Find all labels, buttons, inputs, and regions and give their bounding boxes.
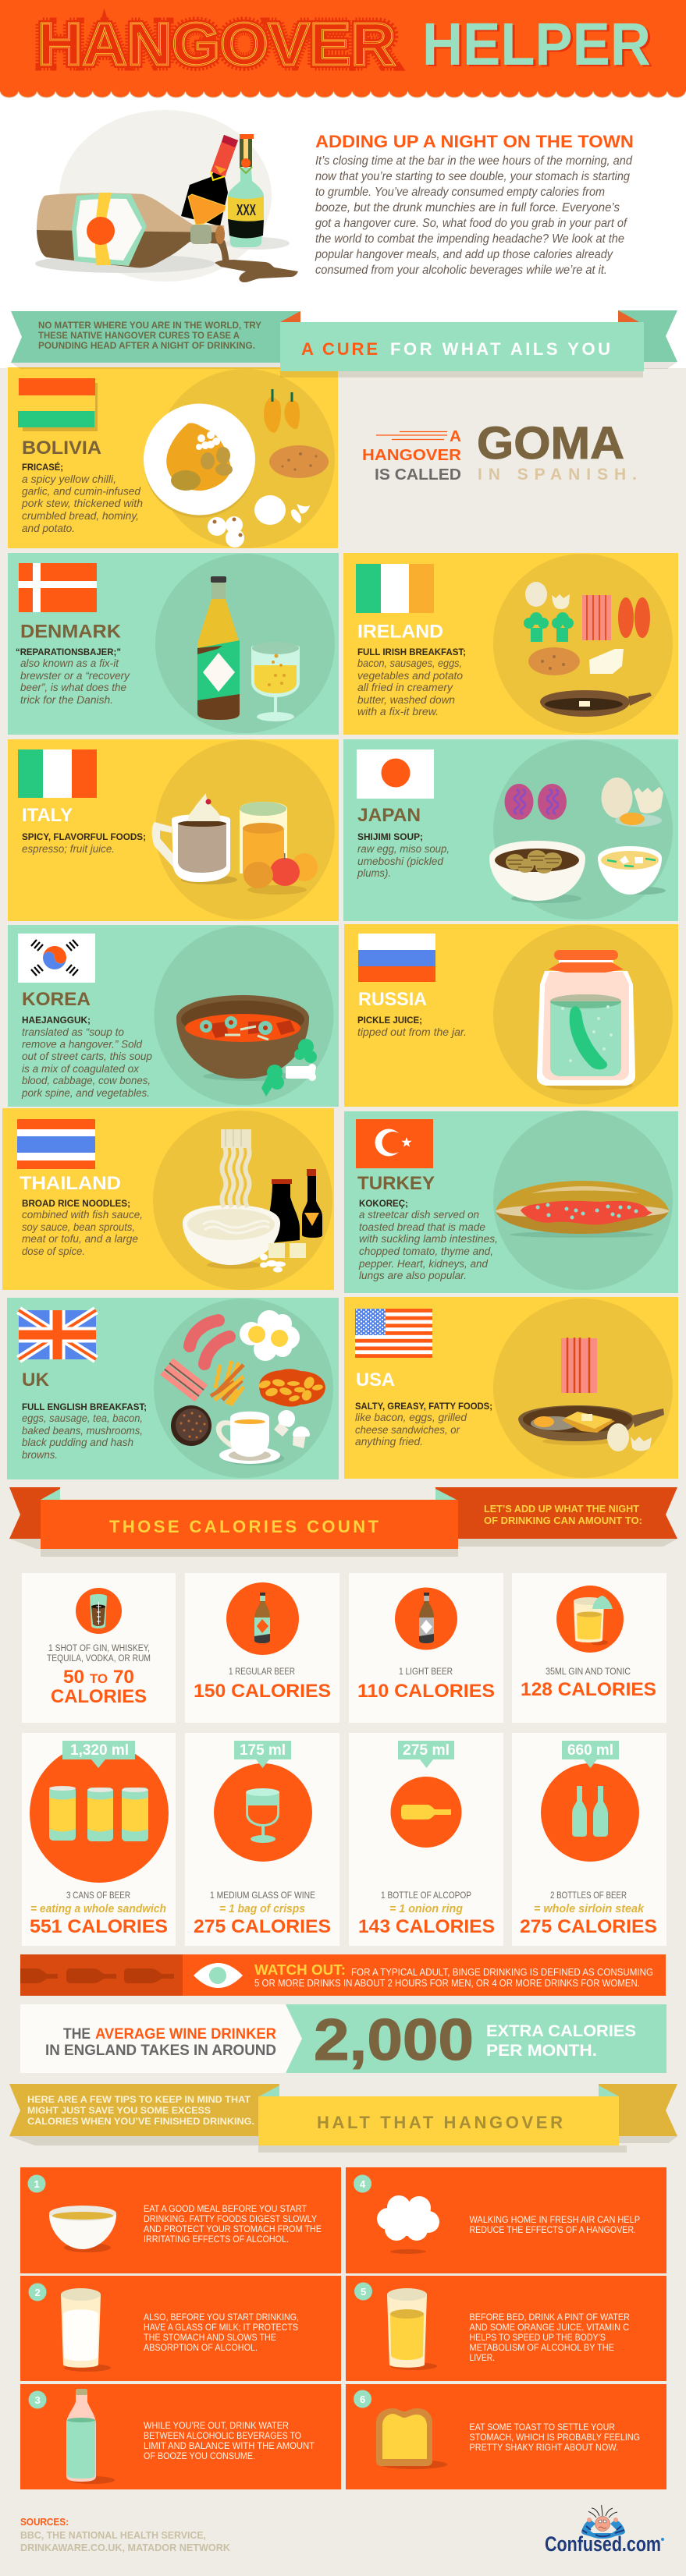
card: gin and tonic bbox=[512, 1573, 666, 1723]
text: Japan: raw egg, miso soup, bbox=[357, 843, 450, 855]
tip 1 bbox=[20, 2167, 341, 2273]
text: Russia bbox=[357, 989, 467, 1038]
tip 2: ABSORPTION OF ALCOHOL. bbox=[144, 2342, 258, 2353]
text: Russia: tipped out from the jar. bbox=[357, 1026, 467, 1038]
icon: water bottle bbox=[66, 2389, 115, 2484]
flag: Thailand bbox=[17, 1119, 95, 1169]
panel: Ireland bbox=[343, 553, 678, 735]
card: glass of wine: 275 CALORIES bbox=[194, 1916, 331, 1937]
text: Turkey: with suckling lamb intestines, bbox=[359, 1233, 498, 1245]
card: gin and tonic: 35ML GIN AND TONIC bbox=[546, 1667, 631, 1677]
text: Japan: JAPAN bbox=[357, 805, 421, 826]
text: Korea: is a mix of coagulated ox bbox=[22, 1063, 140, 1075]
icon: light beer bottle bbox=[419, 1593, 434, 1643]
tip 3: 3 bbox=[34, 2394, 41, 2406]
text: USA: like bacon, eggs, grilled bbox=[355, 1412, 467, 1423]
text: Japan: SHIJIMI SOUP; bbox=[357, 833, 423, 842]
callout: watch out: FOR A TYPICAL ADULT, BINGE DRINKING IS DEFINED AS CONSUMING bbox=[351, 1967, 653, 1978]
text: UK: UK bbox=[22, 1369, 50, 1391]
text: Russia: PICKLE JUICE; bbox=[357, 1016, 422, 1026]
panel: Italy bbox=[8, 739, 339, 921]
tag: 275 ml bbox=[398, 1741, 454, 1768]
icon: eye bbox=[194, 1963, 243, 1988]
illustration: full English breakfast bbox=[160, 1310, 325, 1465]
text: Thailand: dose of spice. bbox=[22, 1245, 85, 1257]
ribbon heading: HALT THAT HANGOVER bbox=[317, 2113, 563, 2132]
ribbon note: CALORIES WHEN YOU’VE FINISHED DRINKING. bbox=[27, 2116, 254, 2127]
icon: toast bbox=[376, 2408, 447, 2469]
flag: Turkey bbox=[356, 1119, 433, 1168]
tip 4 bbox=[346, 2167, 666, 2273]
ribbon heading: FOR WHAT AILS YOU bbox=[390, 339, 610, 359]
text: Korea bbox=[21, 989, 152, 1099]
tip 5 bbox=[346, 2276, 666, 2381]
intro paragraph: got a hangover cure. So, what food do you grab in your part of bbox=[315, 217, 628, 230]
icon: bottles bbox=[20, 1968, 174, 1983]
tip 4: WALKING HOME IN FRESH AIR CAN HELP bbox=[470, 2214, 640, 2225]
tip 6: PRETTY SHAKY RIGHT ABOUT NOW. bbox=[470, 2442, 618, 2453]
text: Bolivia: pork stew, thickened with bbox=[21, 498, 143, 509]
tip 6: EAT SOME TOAST TO SETTLE YOUR bbox=[470, 2422, 615, 2432]
ribbon: halt that hangover bbox=[9, 2084, 677, 2153]
card: regular beer: 150 CALORIES bbox=[194, 1681, 331, 1702]
text: Thailand: combined with fish sauce, bbox=[22, 1209, 143, 1221]
title: HANGOVER bbox=[37, 11, 396, 78]
ribbon note bbox=[38, 321, 261, 351]
illustration: fricase plate bbox=[144, 389, 329, 547]
text: Bolivia: BOLIVIA bbox=[22, 438, 101, 459]
icon: confused character bbox=[581, 2505, 625, 2539]
intro heading: ADDING UP A NIGHT ON THE TOWN bbox=[315, 132, 634, 151]
card: shot: 50 TO 70 bbox=[63, 1667, 134, 1688]
illustration: pickle jar bbox=[537, 950, 635, 1090]
illustration: shijimi soup bbox=[489, 778, 666, 903]
icon: cloud bbox=[377, 2195, 439, 2254]
text: Turkey: toasted bread that is made bbox=[359, 1221, 485, 1233]
hero illustration: spilled bottles bbox=[35, 110, 298, 282]
text: Denmark: trick for the Danish. bbox=[20, 694, 113, 706]
text: UK: black pudding and hash bbox=[22, 1437, 133, 1448]
card: light beer: 110 CALORIES bbox=[357, 1681, 495, 1702]
text: Korea: pork spine, and vegetables. bbox=[21, 1087, 150, 1099]
card: bottle of alcopop bbox=[349, 1733, 503, 1946]
tip 3 bbox=[20, 2384, 341, 2489]
hero illustration: spilled bottles: XXX bbox=[236, 202, 256, 219]
card: 3 cans of beer: 551 CALORIES bbox=[30, 1916, 168, 1937]
tip 1: AND PROTECT YOUR STOMACH FROM THE bbox=[144, 2223, 322, 2234]
text: Japan: plums). bbox=[357, 867, 391, 879]
text: Japan: umeboshi (pickled bbox=[357, 856, 443, 867]
text: Denmark: brewster or a “recovery bbox=[20, 670, 130, 682]
card: regular beer: 1 REGULAR BEER bbox=[229, 1667, 295, 1677]
text: Bolivia: crumbled bread, hominy, bbox=[22, 510, 139, 522]
card: 3 cans of beer: = eating a whole sandwich bbox=[30, 1903, 166, 1915]
tip 4: REDUCE THE EFFECTS OF A HANGOVER. bbox=[470, 2224, 636, 2235]
card: 2 bottles of beer: 2 BOTTLES OF BEER bbox=[550, 1891, 627, 1901]
ribbon heading: A CURE bbox=[301, 339, 378, 359]
ribbon note: POUNDING HEAD AFTER A NIGHT OF DRINKING. bbox=[38, 342, 255, 351]
callout: wine drinker statistic: IN ENGLAND TAKES IN AROUND bbox=[45, 2042, 276, 2059]
card: light beer: 1 LIGHT BEER bbox=[399, 1667, 453, 1677]
text: Korea: translated as “soup to bbox=[22, 1026, 124, 1038]
text: Thailand bbox=[20, 1173, 143, 1257]
card: shot bbox=[22, 1573, 176, 1723]
illustration: rice noodles bbox=[183, 1129, 322, 1273]
text: Ireland: butter, washed down bbox=[357, 694, 455, 706]
flag: USA bbox=[355, 1309, 432, 1358]
flag: Russia bbox=[358, 934, 435, 982]
text: Bolivia bbox=[21, 438, 143, 534]
illustration: haejangguk bowl bbox=[176, 995, 317, 1097]
sources: DRINKAWARE.CO.UK, MATADOR NETWORK bbox=[20, 2542, 231, 2553]
text: Turkey: pepper. Heart, kidneys, and bbox=[358, 1258, 488, 1270]
icon: wine glass bbox=[246, 1788, 279, 1843]
card: 2 bottles of beer bbox=[512, 1733, 666, 1946]
text: Japan bbox=[357, 805, 450, 879]
text: Ireland: bacon, sausages, eggs, bbox=[357, 657, 462, 669]
icon: two beer bottles bbox=[572, 1786, 608, 1837]
text: Italy: SPICY, FLAVORFUL FOODS; bbox=[22, 833, 146, 842]
illustration: kokorec sandwich bbox=[496, 1181, 669, 1238]
tip 6: STOMACH, WHICH IS PROBABLY FEELING bbox=[470, 2432, 640, 2443]
title bbox=[37, 11, 653, 80]
tip 5: AND SOME ORANGE JUICE. VITAMIN C bbox=[470, 2322, 629, 2333]
panel: Bolivia bbox=[8, 367, 338, 548]
sources: BBC, THE NATIONAL HEALTH SERVICE, bbox=[20, 2529, 206, 2541]
text: Bolivia: a spicy yellow chilli, bbox=[22, 473, 116, 485]
tip 1: EAT A GOOD MEAL BEFORE YOU START bbox=[144, 2203, 307, 2214]
text: Ireland: vegetables and potato bbox=[357, 670, 463, 682]
tip 5: BEFORE BED, DRINK A PINT OF WATER bbox=[470, 2312, 630, 2323]
text: UK: baked beans, mushrooms, bbox=[22, 1425, 143, 1437]
text: Korea: KOREA bbox=[22, 989, 91, 1010]
text: Korea: out of street carts, this soup bbox=[22, 1051, 152, 1062]
card: glass of wine: 1 MEDIUM GLASS OF WINE bbox=[210, 1891, 315, 1901]
callout: goma: IS CALLED bbox=[375, 466, 461, 484]
icon: beer cans bbox=[49, 1786, 148, 1841]
tip 1: DRINKING. FATTY FOODS DIGEST SLOWLY bbox=[144, 2213, 317, 2224]
panel: UK bbox=[7, 1298, 339, 1479]
tag: 175 ml: 175 ml bbox=[240, 1742, 286, 1759]
icon: shot glass bbox=[90, 1594, 107, 1628]
tip 6: 6 bbox=[360, 2394, 365, 2405]
card: 3 cans of beer bbox=[22, 1733, 176, 1946]
text: Turkey: TURKEY bbox=[357, 1173, 435, 1194]
text: USA: cheese sandwiches, or bbox=[355, 1424, 460, 1436]
ribbon note: MIGHT JUST SAVE YOU SOME EXCESS bbox=[27, 2105, 211, 2116]
card: shot: CALORIES bbox=[51, 1686, 147, 1707]
tag: 1,320 ml bbox=[62, 1741, 135, 1768]
flag: Italy bbox=[18, 749, 97, 798]
text: Turkey: KOKOREÇ; bbox=[359, 1199, 408, 1209]
text: Ireland bbox=[357, 621, 466, 718]
callout: goma: A bbox=[450, 427, 461, 445]
illustration: bacon and frying pan bbox=[518, 1338, 664, 1451]
text: Italy bbox=[22, 805, 146, 855]
text: Turkey: chopped tomato, thyme and, bbox=[359, 1245, 493, 1257]
text: USA: SALTY, GREASY, FATTY FOODS; bbox=[355, 1402, 492, 1412]
panel: Turkey bbox=[344, 1111, 678, 1293]
title: HANGOVER bbox=[37, 11, 396, 78]
panel: USA bbox=[344, 1297, 678, 1479]
intro paragraph: booze, but the drunk munchies are in full force. Everyone’s bbox=[315, 201, 620, 214]
tip 1: IRRITATING EFFECTS OF ALCOHOL. bbox=[144, 2234, 289, 2245]
icon: glass of orange juice bbox=[387, 2288, 437, 2370]
tip 3: OF BOOZE YOU CONSUME. bbox=[144, 2450, 255, 2461]
text: Bolivia: garlic, and cumin-infused bbox=[22, 485, 140, 498]
tag: 275 ml: 275 ml bbox=[403, 1742, 450, 1759]
text: Denmark: also known as a fix-it bbox=[20, 657, 119, 669]
intro paragraph: popular hangover meals, and add up those calories already bbox=[315, 248, 613, 261]
ribbon note: NO MATTER WHERE YOU ARE IN THE WORLD, TRY bbox=[38, 321, 261, 331]
tip 6 bbox=[346, 2384, 666, 2489]
tip 5: METABOLISM OF ALCOHOL BY THE bbox=[470, 2342, 614, 2353]
illustration: espresso and juice bbox=[152, 793, 318, 895]
text: UK bbox=[22, 1369, 147, 1461]
tip 3: LIMIT AND BALANCE WITH THE AMOUNT bbox=[144, 2440, 315, 2451]
tip 3: BETWEEN ALCOHOLIC BEVERAGES TO bbox=[144, 2430, 301, 2441]
text: UK: eggs, sausage, tea, bacon, bbox=[22, 1412, 143, 1424]
tag: 1,320 ml: 1,320 ml bbox=[70, 1742, 129, 1759]
text: Denmark: “REPARATIONSBAJER;” bbox=[16, 648, 121, 657]
text: Thailand: BROAD RICE NOODLES; bbox=[22, 1199, 130, 1209]
tip 4: 4 bbox=[360, 2178, 366, 2190]
text: Turkey: a streetcar dish served on bbox=[359, 1209, 479, 1221]
card: bottle of alcopop: 143 CALORIES bbox=[358, 1916, 495, 1937]
icon: bowl bbox=[49, 2206, 116, 2252]
flag: Denmark bbox=[18, 563, 97, 612]
flag: Japan bbox=[357, 749, 434, 799]
card: regular beer bbox=[185, 1573, 339, 1723]
sources bbox=[20, 2516, 231, 2553]
card: bottle of alcopop: = 1 onion ring bbox=[389, 1903, 463, 1915]
text: Korea: HAEJANGGUK; bbox=[22, 1016, 91, 1026]
ribbon note bbox=[27, 2094, 254, 2127]
ribbon heading: THOSE CALORIES COUNT bbox=[109, 1517, 379, 1536]
callout: wine drinker statistic: AVERAGE WINE DRINKER bbox=[95, 2025, 276, 2043]
ribbon: a cure for what ails you bbox=[11, 310, 677, 377]
intro paragraph: to grumble. You’ve already consumed empty calories from bbox=[315, 186, 605, 199]
text: Denmark bbox=[16, 621, 130, 706]
illustration: beer bottle and glass bbox=[197, 576, 300, 721]
ribbon note: HERE ARE A FEW TIPS TO KEEP IN MIND THAT bbox=[27, 2094, 251, 2105]
tip 2: HAVE A GLASS OF MILK; IT PROTECTS bbox=[144, 2322, 298, 2333]
header banner bbox=[0, 0, 686, 100]
callout: goma bbox=[362, 418, 637, 484]
logo: Confused.com bbox=[545, 2505, 664, 2556]
card: bottle of alcopop: 1 BOTTLE OF ALCOPOP bbox=[381, 1891, 471, 1901]
flag: Korea bbox=[18, 934, 95, 983]
card: 2 bottles of beer: 275 CALORIES bbox=[520, 1916, 657, 1937]
card: light beer bbox=[349, 1573, 503, 1723]
title: HELPER bbox=[422, 11, 651, 78]
callout: wine drinker statistic bbox=[20, 2004, 666, 2073]
text: Ireland: FULL IRISH BREAKFAST; bbox=[357, 648, 466, 657]
text: Bolivia: and potato. bbox=[22, 523, 75, 534]
text: Italy: ITALY bbox=[22, 805, 73, 826]
panel: Denmark bbox=[8, 553, 339, 735]
callout: watch out bbox=[20, 1954, 666, 1996]
card: 3 cans of beer: 3 CANS OF BEER bbox=[66, 1891, 130, 1901]
text: Ireland: with a fix-it brew. bbox=[357, 706, 439, 718]
tip 5: LIVER. bbox=[470, 2352, 495, 2363]
ribbon note bbox=[484, 1503, 642, 1526]
flag: UK bbox=[19, 1310, 96, 1359]
callout: wine drinker statistic: THE bbox=[63, 2025, 91, 2043]
intro paragraph: now that you’re starting to see double, your stomach is starting bbox=[315, 170, 630, 183]
intro paragraph: It’s closing time at the bar in the wee hours of the morning, and bbox=[315, 154, 633, 168]
text: Korea: blood, cabbage, cow bones, bbox=[22, 1075, 151, 1086]
text: Denmark: beer”, is what does the bbox=[20, 682, 126, 693]
tip 2: THE STOMACH AND SLOWS THE bbox=[144, 2332, 276, 2343]
ribbon note: LET’S ADD UP WHAT THE NIGHT bbox=[484, 1503, 639, 1515]
tip 2: 2 bbox=[34, 2287, 41, 2298]
tip 3: WHILE YOU’RE OUT, DRINK WATER bbox=[144, 2420, 289, 2431]
tip 2: ALSO, BEFORE YOU START DRINKING, bbox=[144, 2312, 299, 2323]
icon: regular beer bottle bbox=[254, 1593, 270, 1643]
ribbon note: THESE NATIVE HANGOVER CURES TO EASE A bbox=[38, 331, 240, 341]
intro paragraph: the world to combat the impending headache? We look at the bbox=[315, 232, 624, 246]
text: USA: anything fried. bbox=[355, 1436, 423, 1447]
callout: watch out: 5 OR MORE DRINKS IN ABOUT 2 HOURS FOR MEN, OR 4 OR MORE DRINKS FOR WOMEN. bbox=[254, 1978, 640, 1989]
callout: watch out: WATCH OUT: bbox=[254, 1962, 346, 1978]
text: Italy: espresso; fruit juice. bbox=[22, 843, 115, 855]
ribbon: those calories count bbox=[9, 1487, 677, 1557]
flag: Bolivia bbox=[18, 378, 98, 431]
text: Thailand: meat or tofu, and a large bbox=[22, 1233, 138, 1245]
card: gin and tonic: 128 CALORIES bbox=[521, 1679, 656, 1700]
tip 1: 1 bbox=[34, 2178, 40, 2190]
panel: Thailand bbox=[2, 1108, 334, 1290]
tag: 175 ml bbox=[234, 1741, 291, 1768]
text: UK: browns. bbox=[22, 1449, 58, 1461]
callout: goma: IN SPANISH. bbox=[478, 466, 637, 484]
title: HANGOVER bbox=[37, 11, 396, 78]
flag: Ireland bbox=[356, 564, 434, 613]
text: USA: USA bbox=[356, 1369, 395, 1391]
text: Denmark: DENMARK bbox=[20, 621, 122, 643]
tag: 660 ml: 660 ml bbox=[567, 1742, 613, 1759]
card: shot: TEQUILA, VODKA, OR RUM bbox=[47, 1654, 151, 1664]
panel: Korea bbox=[8, 925, 339, 1107]
callout: wine drinker statistic: EXTRA CALORIES bbox=[486, 2022, 636, 2040]
sources: SOURCES: bbox=[20, 2516, 69, 2528]
text: Ireland: IRELAND bbox=[357, 621, 443, 643]
text: Korea: remove a hangover.” Sold bbox=[22, 1039, 142, 1050]
callout: goma: HANGOVER bbox=[362, 446, 461, 464]
callout: wine drinker statistic: 2,000 bbox=[314, 2007, 474, 2072]
text: Bolivia: FRICASÉ; bbox=[22, 462, 63, 473]
text: Thailand: THAILAND bbox=[20, 1173, 121, 1194]
icon: glass of milk bbox=[61, 2288, 111, 2372]
title: HANGOVER bbox=[37, 11, 396, 78]
tip 5: 5 bbox=[361, 2286, 366, 2298]
ribbon note: OF DRINKING CAN AMOUNT TO: bbox=[484, 1515, 642, 1526]
tip 5: HELPS TO SPEED UP THE BODY’S bbox=[470, 2332, 606, 2343]
callout: wine drinker statistic: PER MONTH. bbox=[486, 2042, 597, 2060]
text: Russia: RUSSIA bbox=[358, 989, 427, 1010]
intro paragraph: consumed from your alcoholic beverages while we’re at it. bbox=[315, 264, 607, 277]
callout: goma: GOMA bbox=[477, 418, 624, 469]
tip 2 bbox=[20, 2276, 341, 2381]
text: Thailand: soy sauce, bean sprouts, bbox=[22, 1221, 135, 1233]
text: Turkey: lungs are also popular. bbox=[359, 1270, 467, 1281]
card: glass of wine: = 1 bag of crisps bbox=[219, 1903, 305, 1915]
panel: Japan bbox=[343, 739, 678, 921]
icon: gin and tonic bbox=[574, 1596, 613, 1646]
panel: Russia bbox=[344, 924, 678, 1107]
card: glass of wine bbox=[185, 1733, 339, 1946]
title: HELPER bbox=[425, 12, 653, 80]
text: Ireland: all fried in creamery bbox=[357, 682, 453, 693]
intro paragraph bbox=[315, 154, 633, 277]
text: UK: FULL ENGLISH BREAKFAST; bbox=[22, 1403, 147, 1412]
tag: 660 ml bbox=[562, 1741, 619, 1768]
card: shot: 1 SHOT OF GIN, WHISKEY, bbox=[48, 1644, 150, 1653]
card: 2 bottles of beer: = whole sirloin steak bbox=[534, 1903, 645, 1915]
icon: alcopop bottle bbox=[401, 1805, 451, 1819]
text: USA bbox=[355, 1369, 492, 1447]
illustration: full Irish breakfast bbox=[524, 582, 652, 717]
text: Turkey bbox=[357, 1173, 498, 1281]
